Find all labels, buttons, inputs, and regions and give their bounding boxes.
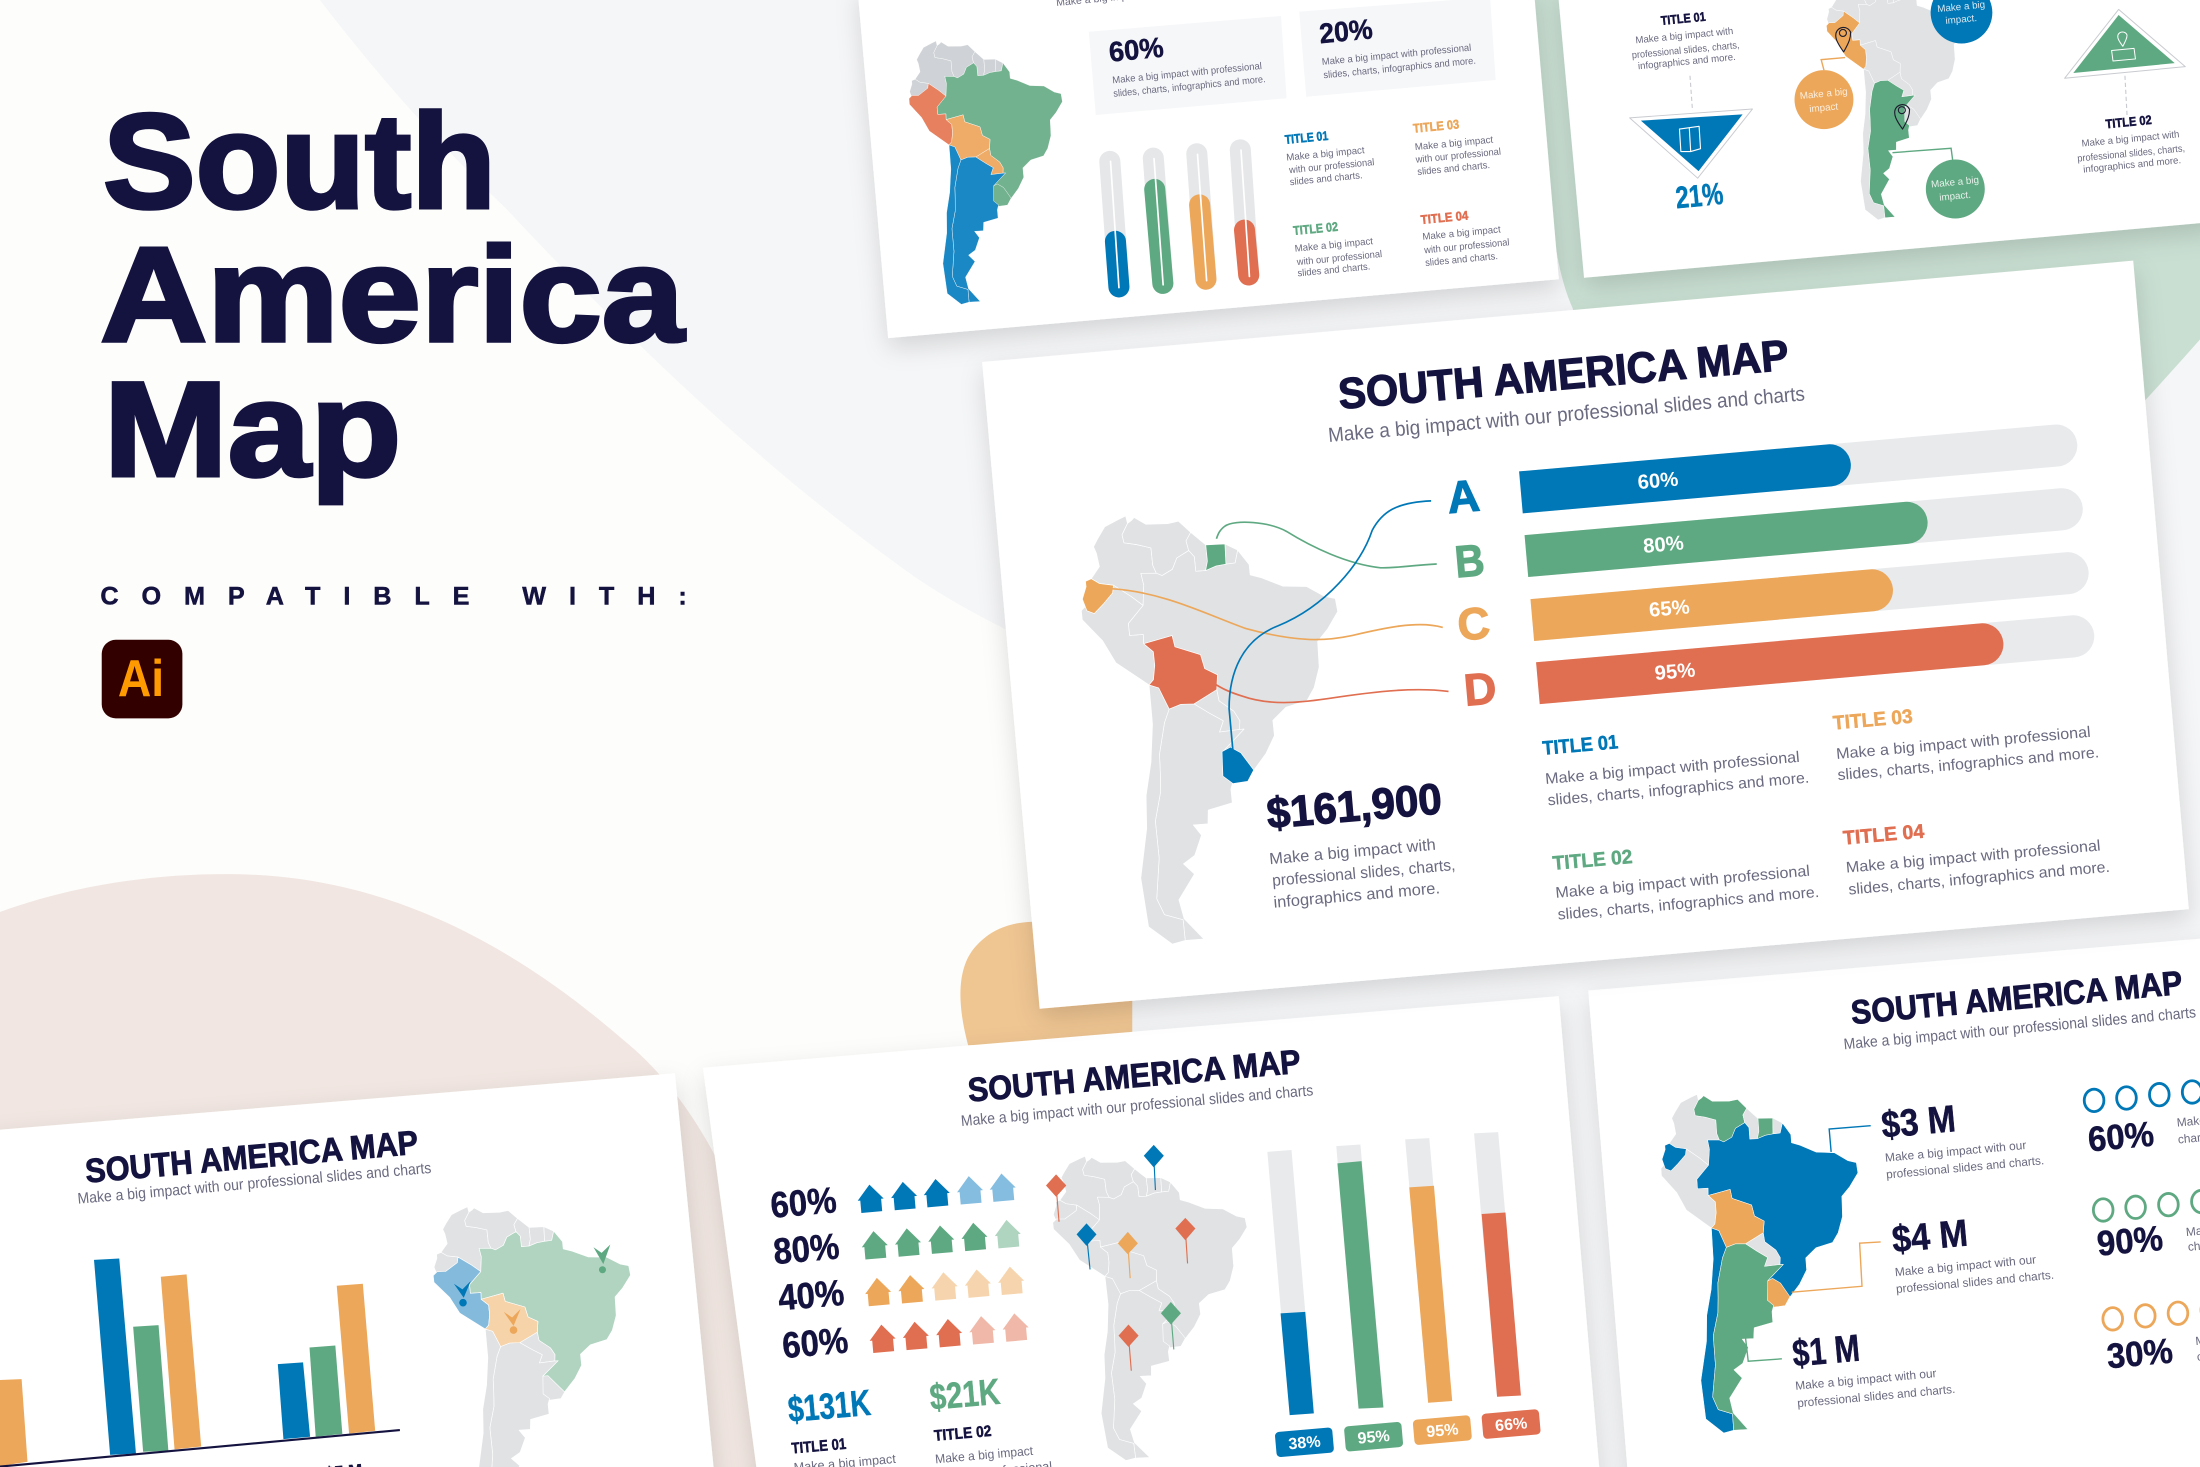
stat: $1 M: professional slides and charts. xyxy=(1797,1382,1956,1410)
card: 20% xyxy=(1299,0,1496,97)
callout: green circle: Make a big xyxy=(1931,175,1979,190)
text: title 03: TITLE 03 xyxy=(1832,706,1914,735)
bar: 80%: 80% xyxy=(1642,532,1685,558)
stat: $3 M: $3 M xyxy=(1880,1098,1957,1147)
text: title 01 block: infographics and more. xyxy=(1637,52,1736,72)
stat: $1 M: $1 M xyxy=(1791,1328,1862,1376)
text: title 02: Make a big impact xyxy=(1294,236,1374,255)
stat: $161,900: infographics and more. xyxy=(1273,879,1441,912)
dashed connector xyxy=(2125,76,2127,115)
stat row: 40% orange houses: 40% xyxy=(777,1272,846,1318)
bar: 95%: 95% xyxy=(1654,659,1696,685)
stat: 90% green rings xyxy=(2093,1190,2200,1264)
text: title 02 xyxy=(1552,846,1820,924)
text: title 02 xyxy=(1293,220,1383,279)
panel: bottom-left slide with column chart xyxy=(0,1073,716,1467)
callout: orange circle: Make a big xyxy=(1799,87,1848,102)
text: title 02 block xyxy=(2077,113,2185,176)
text: title 01 block xyxy=(1631,10,1740,72)
text: title 02 block: professional slides, charts, xyxy=(2077,143,2185,165)
stat: $21K: $21K xyxy=(928,1371,1002,1418)
stat: $3 M: Make a big impact with our xyxy=(1884,1138,2027,1165)
stat: $131K: TITLE 01 xyxy=(791,1436,847,1458)
bar: 65% xyxy=(1530,550,2090,641)
text: title 02 block: TITLE 02 xyxy=(2105,113,2152,131)
background: green blob xyxy=(1534,0,2200,421)
text: title 04: Make a big impact xyxy=(1422,224,1501,243)
label: A: A xyxy=(1445,470,1482,523)
text: title 03: with our professional xyxy=(1414,147,1501,166)
text: title 02: slides and charts. xyxy=(1297,261,1371,279)
map: highlighted countries with pins xyxy=(426,1195,655,1467)
chart: vertical progress bars xyxy=(1267,1132,1521,1415)
text: title 04 xyxy=(1420,209,1510,269)
main heading xyxy=(100,86,685,505)
text: title 01 block: professional slides, charts, xyxy=(1631,40,1740,61)
stat: $4 M: Make a big impact with our xyxy=(1894,1252,2037,1279)
bar: 65%: 65% xyxy=(1648,596,1691,622)
text: title 04: slides, charts, infographics and more. xyxy=(1848,859,2111,899)
slide heading: SOUTH AMERICA MAP xyxy=(84,1125,420,1191)
background: pink circle xyxy=(0,874,786,1467)
icon: Adobe Illustrator xyxy=(102,640,182,718)
background: cream shape xyxy=(0,0,1122,1467)
text: title 01 xyxy=(1284,129,1375,188)
text: title 04: slides and charts. xyxy=(1425,251,1498,269)
text: title 03: slides, charts, infographics and more. xyxy=(1837,744,2100,784)
chart: column bars xyxy=(0,1259,400,1467)
text: title 02 block: infographics and more. xyxy=(2083,155,2182,176)
text: title 04: TITLE 04 xyxy=(1842,821,1925,850)
text: title 02: Make a big impact with professional xyxy=(1555,863,1811,902)
bar: 60% xyxy=(1519,423,2079,513)
map: Peru and Argentina highlighted xyxy=(1821,0,1985,222)
stat: 30% orange rings: 30% xyxy=(2105,1332,2174,1376)
stat: $131K: $131K xyxy=(786,1382,872,1430)
stat: $4 M: professional slides and charts. xyxy=(1895,1268,2055,1296)
icon: map pins xyxy=(1836,27,1910,129)
stat: $4 M xyxy=(1890,1213,2055,1296)
connector lines xyxy=(1821,58,1953,160)
slide subtitle: Make a big impact with our professional slides and charts xyxy=(960,1082,1314,1130)
callout: blue circle: impact. xyxy=(1945,13,1978,27)
stat: $3 M: professional slides and charts. xyxy=(1886,1153,2045,1182)
bar: 95% xyxy=(1536,614,2096,704)
stat: $161,900: professional slides, charts, xyxy=(1271,856,1456,890)
text: title 02: TITLE 02 xyxy=(1293,220,1339,238)
card: 60%: 60% xyxy=(1107,32,1165,68)
panel: central main slide xyxy=(982,261,2189,1009)
stat row: 80% green houses: 80% xyxy=(772,1226,841,1272)
icon: inverted blue triangle xyxy=(1630,109,1752,178)
label: 95% green: 95% xyxy=(1357,1427,1391,1448)
card: 60% xyxy=(1089,16,1287,115)
panel: top-right slide with triangles xyxy=(1557,0,2200,278)
stat: $161,900: $161,900 xyxy=(1265,775,1444,838)
map: grey with pins xyxy=(1045,1145,1276,1463)
text: title 01: slides and charts. xyxy=(1289,170,1363,188)
connector lines xyxy=(1745,1126,1881,1361)
label: 38% xyxy=(1275,1427,1334,1457)
text: title 02: TITLE 02 xyxy=(1552,846,1633,875)
text: title 03: TITLE 03 xyxy=(1412,117,1460,136)
label: 95% orange xyxy=(1413,1415,1472,1445)
callout: orange circle xyxy=(1795,70,1853,129)
callout: green circle: impact. xyxy=(1939,190,1971,204)
stat: $161,900: Make a big impact with xyxy=(1269,836,1436,868)
icon: green triangle xyxy=(2065,9,2185,78)
text: title 01 block: TITLE 01 xyxy=(1660,10,1706,28)
label: 66%: 66% xyxy=(1494,1414,1528,1435)
text: title 03 xyxy=(1412,117,1501,178)
panel: bottom-right slide xyxy=(1588,937,2200,1467)
main heading: Map xyxy=(104,354,401,505)
card: 20%: 20% xyxy=(1318,13,1374,49)
stat row: 60% red houses: 60% xyxy=(780,1320,850,1366)
text: title 01: TITLE 01 xyxy=(1284,129,1329,147)
text: title 02: slides, charts, infographics and more. xyxy=(1557,884,1820,924)
bar: 80% xyxy=(1525,486,2085,577)
text: title 01: Make a big impact with professional xyxy=(1544,749,1800,788)
text: title 01 block: Make a big impact with xyxy=(1635,26,1734,46)
main heading: America xyxy=(100,219,685,370)
slide heading: SOUTH AMERICA MAP xyxy=(966,1044,1302,1110)
callout: blue circle: Make a big xyxy=(1937,0,1986,15)
text: title 03: slides and charts. xyxy=(1417,160,1491,178)
stat: 21%: 21% xyxy=(1674,176,1725,215)
map: highlighted countries xyxy=(1072,501,1370,948)
stat: 60% blue rings xyxy=(2084,1081,2200,1159)
label: 38%: 38% xyxy=(1288,1433,1321,1453)
dashed connector xyxy=(1690,76,1693,111)
text: title 03 xyxy=(1832,706,2100,784)
chart: thermometer bars xyxy=(1110,150,1249,288)
card: 20%: Make a big impact with professional xyxy=(1321,43,1472,68)
main heading: South xyxy=(103,86,496,237)
map: multi-colour countries xyxy=(1656,1085,1876,1435)
stat: $21K: TITLE 02 xyxy=(933,1423,992,1445)
icon: Adobe Illustrator: Ai xyxy=(118,650,164,708)
label: C: C xyxy=(1455,597,1492,650)
text: title 04 xyxy=(1842,821,2111,899)
text: title 01: TITLE 01 xyxy=(1542,731,1619,760)
background: orange blob xyxy=(960,922,1132,1045)
card: 60%: Make a big impact with professional xyxy=(1112,61,1262,86)
panel: bottom-middle slide xyxy=(703,996,1601,1467)
text: title 04: Make a big impact with professional xyxy=(1845,837,2101,877)
text: title 04: with our professional xyxy=(1423,237,1510,256)
slide subtitle: Make a big impact with our professional slides and charts xyxy=(77,1160,432,1208)
text: title 01: slides, charts, infographics and more. xyxy=(1547,770,1810,809)
slide heading: SOUTH AMERICA MAP xyxy=(1336,332,1791,419)
panel: top-left slide with thermometers xyxy=(857,0,1559,338)
stat row: 60% blue houses xyxy=(769,1172,1017,1226)
stat: $131K xyxy=(786,1382,897,1467)
stat row: 60% blue houses: 60% xyxy=(769,1179,838,1226)
callout: orange circle: impact xyxy=(1809,101,1839,115)
label: 66% xyxy=(1481,1409,1541,1439)
slide subtitle: Make a big impact with our professional slides and charts xyxy=(1327,383,1806,447)
stat: $161,900 xyxy=(1265,775,1456,912)
stat: $3 M xyxy=(1880,1098,2045,1182)
text: title 03: Make a big impact xyxy=(1414,135,1494,153)
label: 95% orange: 95% xyxy=(1426,1420,1459,1441)
compatible with label: COMPATIBLE WITH: xyxy=(100,583,687,611)
curves linking countries to letters xyxy=(1111,501,1449,755)
text: title 03: Make a big impact with professional xyxy=(1835,724,2091,763)
stat row: 60% red houses xyxy=(780,1312,1030,1366)
stat: 90% green rings: 90% xyxy=(2095,1219,2165,1264)
callout: blue circle xyxy=(1931,0,1992,43)
text: title 01: with our professional xyxy=(1288,157,1375,176)
text: title 02 block: Make a big impact with xyxy=(2081,129,2180,150)
label: D: D xyxy=(1462,662,1498,716)
stat row: 80% green houses xyxy=(772,1219,1022,1272)
stat row: 40% orange houses xyxy=(777,1266,1025,1318)
map: colored South America xyxy=(904,34,1080,306)
label: B: B xyxy=(1453,534,1486,587)
card: 20%: slides, charts, infographics and more. xyxy=(1323,56,1476,81)
stat: $4 M: $4 M xyxy=(1890,1213,1970,1261)
text: title 01: Make a big impact xyxy=(1286,145,1365,164)
text: title 02: with our professional xyxy=(1295,249,1383,268)
bar: 60%: 60% xyxy=(1637,469,1679,494)
stat: $1 M xyxy=(1791,1328,1956,1410)
label: 95% green xyxy=(1344,1422,1403,1452)
stat: $1 M: Make a big impact with our xyxy=(1795,1366,1937,1393)
text: title 01 xyxy=(1542,731,1810,809)
callout: green circle xyxy=(1926,160,1985,218)
card: 60%: slides, charts, infographics and more. xyxy=(1113,74,1266,100)
stat: 30% orange rings xyxy=(2103,1299,2200,1376)
stat: $21K: Make a big impact xyxy=(935,1444,1034,1466)
text: title 04: TITLE 04 xyxy=(1420,209,1469,227)
stat: $21K xyxy=(928,1371,1053,1467)
stat: 60% blue rings: 60% xyxy=(2086,1115,2156,1159)
